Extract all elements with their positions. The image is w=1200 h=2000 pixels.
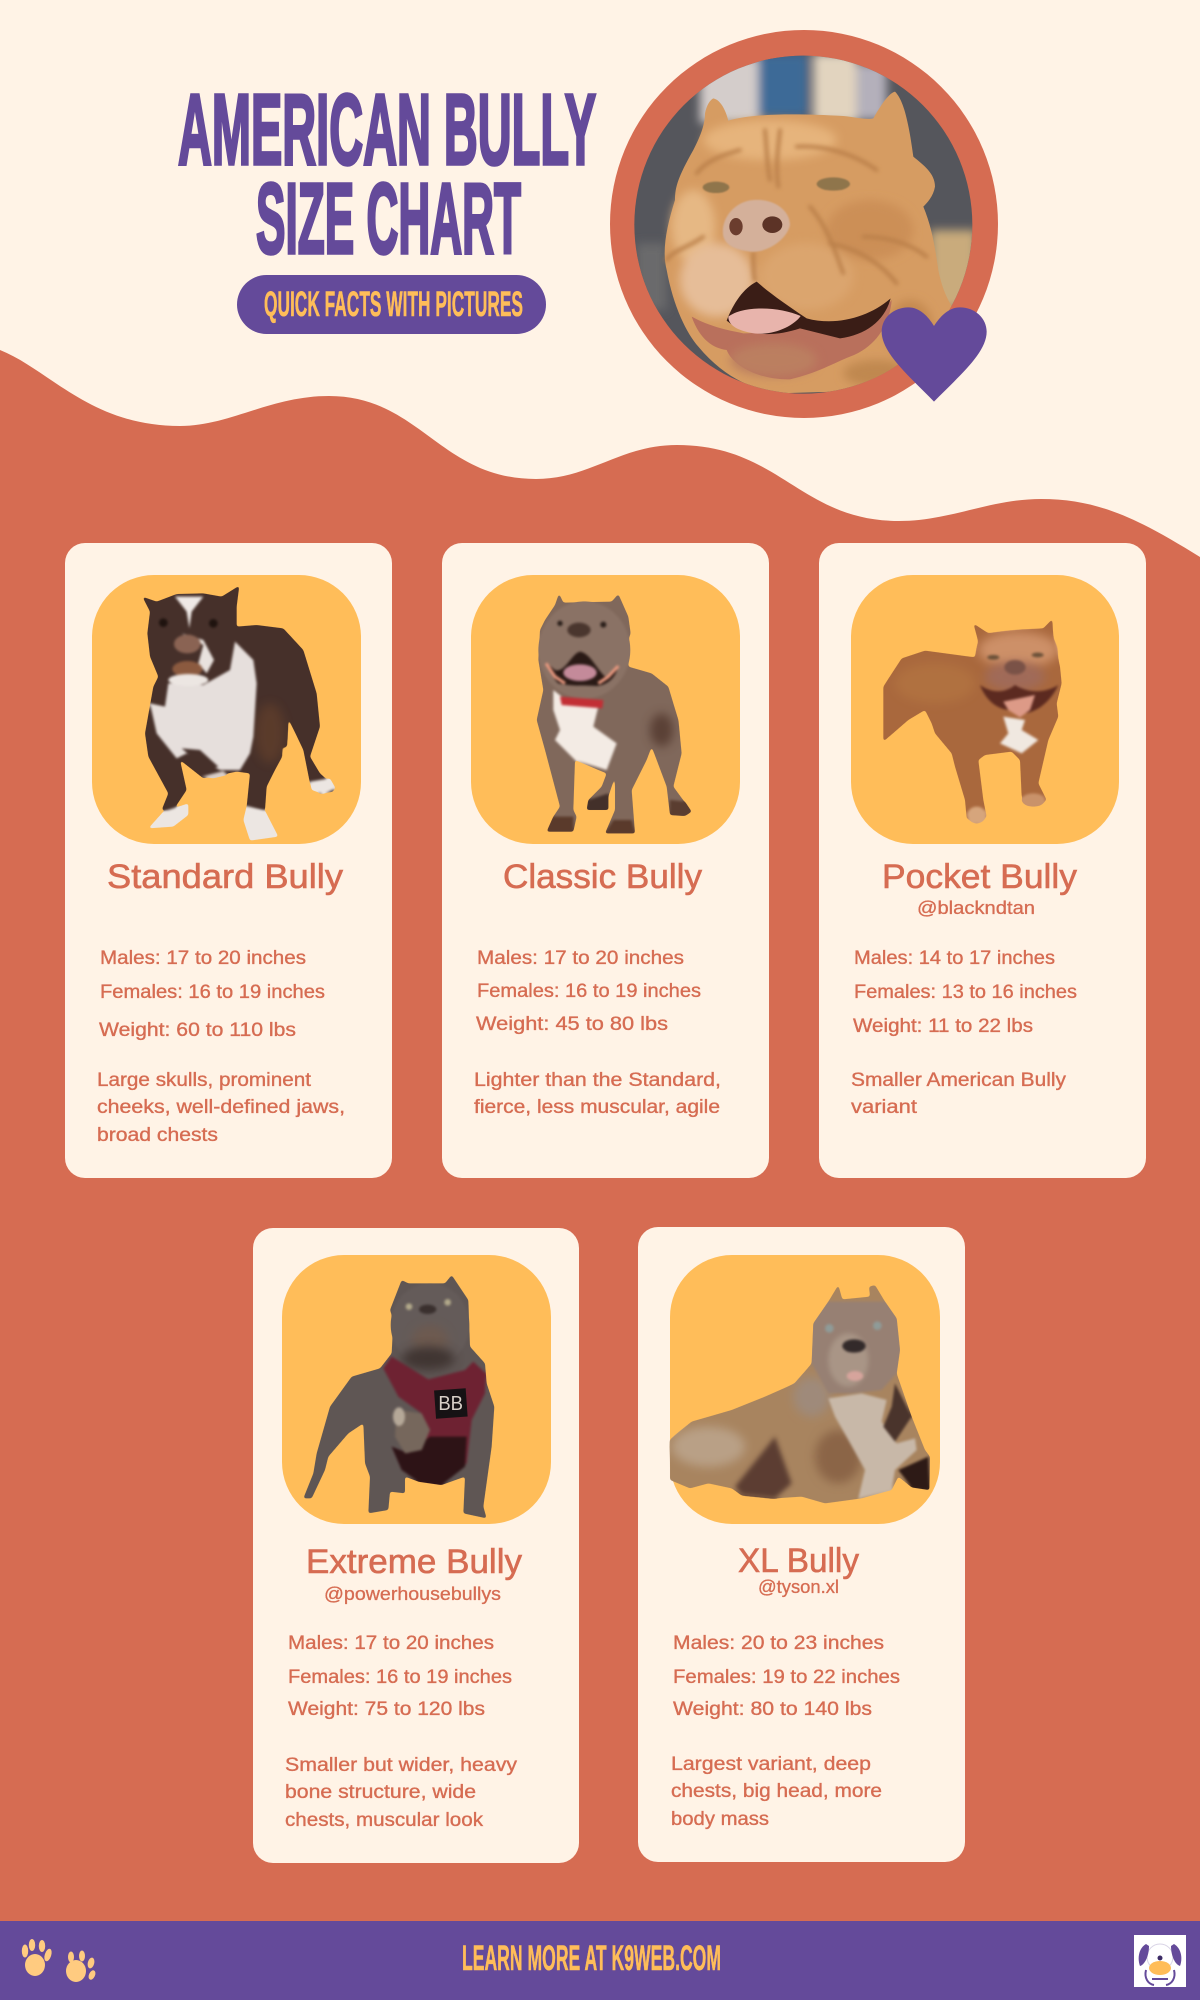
heading: Standard Bully [107, 858, 343, 896]
title [178, 74, 596, 275]
heading: Extreme Bully [306, 1543, 522, 1581]
icon: paw prints [22, 1939, 97, 1982]
description [285, 1755, 518, 1831]
credit: @tyson.xl [758, 1577, 839, 1597]
description: variant [851, 1097, 918, 1118]
heading: Classic Bully [503, 858, 702, 896]
description: broad chests [97, 1125, 218, 1146]
heading: Pocket Bully [882, 858, 1077, 896]
description: Smaller American Bully [851, 1070, 1067, 1091]
stats [288, 1633, 512, 1720]
lower jaw [692, 300, 892, 379]
stats [673, 1633, 900, 1720]
image tile: Classic Bully dog [471, 575, 740, 844]
stats: Weight: 11 to 22 lbs [853, 1016, 1033, 1037]
stats: Males: 17 to 20 inches [477, 948, 684, 969]
description: body mass [671, 1809, 769, 1830]
wavy terracotta background [0, 350, 1200, 1925]
stats: Females: 13 to 16 inches [854, 982, 1077, 1003]
description: fierce, less muscular, agile [474, 1097, 720, 1118]
stats: Males: 14 to 17 inches [854, 948, 1055, 969]
image tile: Extreme Bully dog [282, 1255, 551, 1524]
stats: Weight: 45 to 80 lbs [476, 1014, 668, 1035]
description [474, 1070, 721, 1118]
stats [476, 948, 701, 1035]
subtitle pill: QUICK FACTS WITH PICTURES [264, 285, 523, 324]
nose [723, 200, 790, 252]
description: Smaller but wider, heavy [285, 1755, 518, 1776]
description [671, 1754, 882, 1830]
panel: Extreme Bully [253, 1228, 579, 1863]
stats: Females: 16 to 19 inches [100, 982, 325, 1003]
description: Large skulls, prominent [97, 1070, 312, 1091]
description: Lighter than the Standard, [474, 1070, 721, 1091]
description [97, 1070, 345, 1146]
subtitle pill [237, 275, 546, 334]
panel: XL Bully [638, 1227, 965, 1862]
stats: Weight: 75 to 120 lbs [288, 1699, 485, 1720]
description: chests, big head, more [671, 1781, 882, 1802]
stats: Weight: 80 to 140 lbs [673, 1699, 872, 1720]
stats: Males: 17 to 20 inches [288, 1633, 494, 1654]
panel: Standard Bully [65, 543, 392, 1178]
description: cheeks, well-defined jaws, [97, 1097, 345, 1118]
heading: XL Bully [738, 1542, 859, 1580]
image tile: Extreme Bully dog: BB [438, 1392, 463, 1415]
credit: @powerhousebullys [324, 1584, 501, 1604]
image tile: Standard Bully dog [92, 575, 361, 844]
image tile: Pocket Bully dog [851, 575, 1119, 844]
tongue [728, 308, 801, 334]
infographic canvas: AMERICAN BULLY [178, 74, 596, 186]
mouth [727, 282, 891, 338]
footer band [0, 1921, 1200, 2000]
stats: Weight: 60 to 110 lbs [99, 1020, 296, 1041]
description [851, 1070, 1067, 1118]
stats: Females: 19 to 22 inches [673, 1667, 900, 1688]
stats: Females: 16 to 19 inches [288, 1667, 512, 1688]
panel: Classic Bully [442, 543, 769, 1178]
icon: K9 Web logo [1134, 1935, 1186, 1987]
hero portrait: dog face in circle [610, 30, 998, 418]
description: bone structure, wide [285, 1782, 476, 1803]
description: Largest variant, deep [671, 1754, 871, 1775]
description: chests, muscular look [285, 1810, 484, 1831]
stats: Males: 20 to 23 inches [673, 1633, 884, 1654]
stats: Males: 17 to 20 inches [100, 948, 306, 969]
footer call to action: LEARN MORE AT K9WEB.COM [462, 1939, 721, 1978]
image tile: XL Bully dog [670, 1255, 940, 1524]
credit: @blackndtan [917, 898, 1035, 918]
stats: Females: 16 to 19 inches [477, 981, 701, 1002]
stats [853, 948, 1077, 1037]
title: SIZE CHART [256, 163, 521, 275]
panel: Pocket Bully [819, 543, 1146, 1178]
stats [99, 948, 325, 1041]
icon: heart [882, 307, 987, 402]
